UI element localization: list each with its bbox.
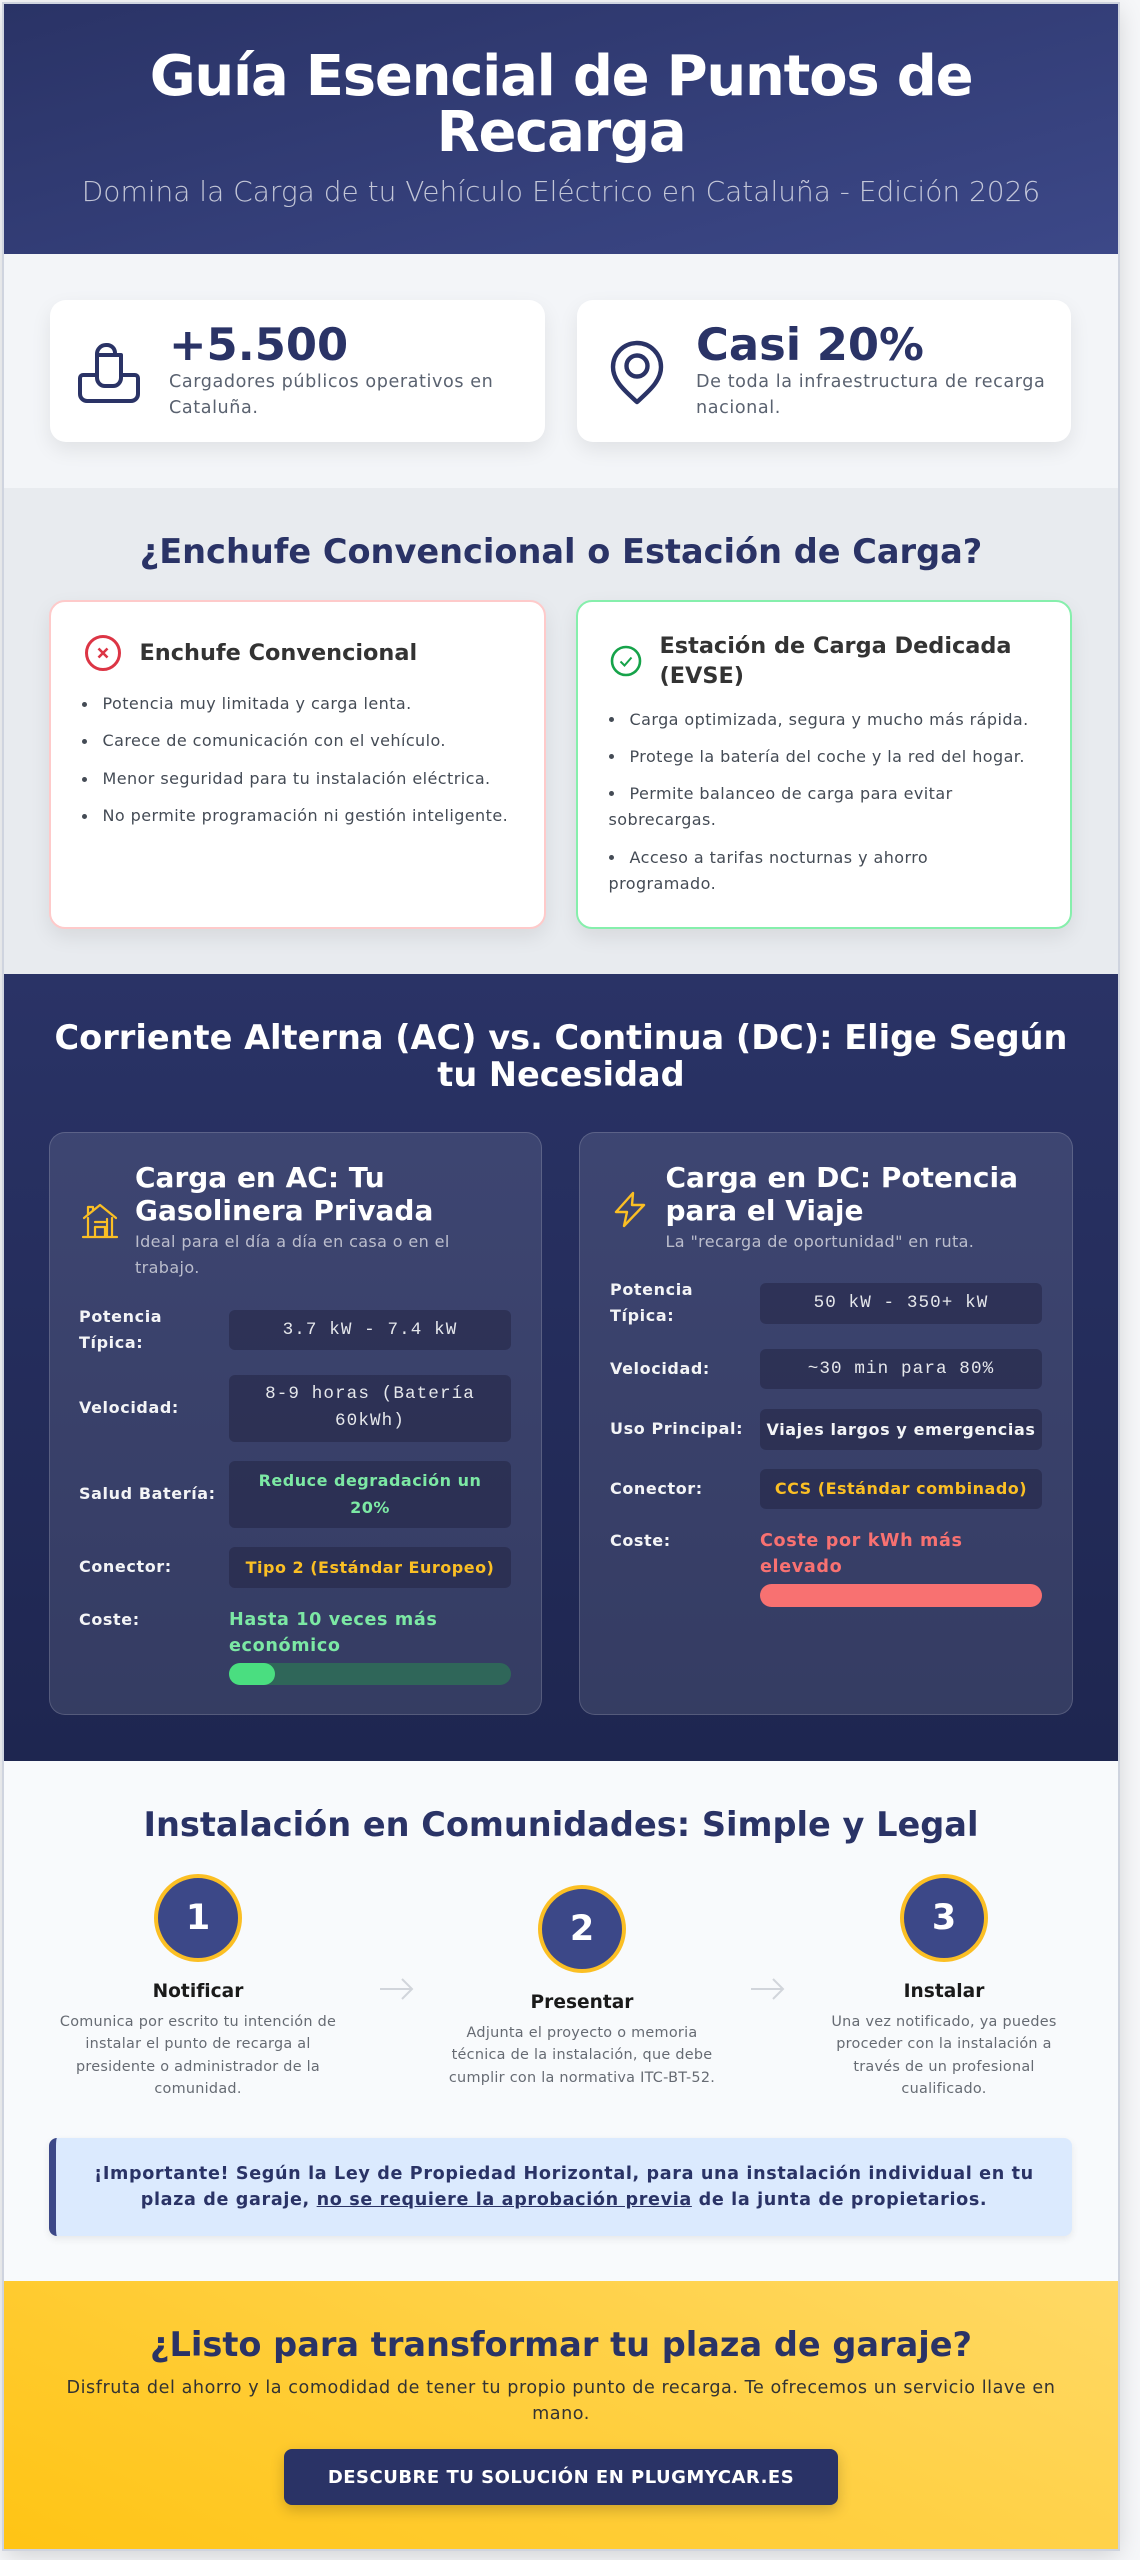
step number: 1 xyxy=(186,1898,210,1938)
stat description: Cataluña. xyxy=(169,398,259,418)
panel title: Estación de Carga Dedicada xyxy=(660,633,1012,659)
DC title: Carga en DC: Potencia xyxy=(666,1161,1018,1194)
icon: check xyxy=(610,646,642,676)
DC row: speed: ~30 min para 80% xyxy=(808,1359,994,1379)
stat value: Casi 20% xyxy=(696,318,924,371)
DC row: cost with bar xyxy=(610,1531,1042,1607)
arrow xyxy=(751,1978,784,2000)
AC row: power: Potencia xyxy=(79,1307,162,1326)
AC row: connector: Conector: xyxy=(79,1557,172,1576)
step title: Presentar xyxy=(531,1992,633,2013)
stat value: +5.500 xyxy=(169,318,348,371)
DC row: connector: CCS (Estándar combinado) xyxy=(775,1479,1027,1498)
AC title: Carga en AC: Tu xyxy=(135,1161,385,1194)
panel: dedicated charging station xyxy=(576,600,1072,929)
feature list: Carece de comunicación con el vehículo. xyxy=(102,731,446,750)
AC subtitle: Ideal para el día a día en casa o en el xyxy=(135,1232,450,1251)
AC subtitle: trabajo. xyxy=(135,1258,200,1277)
step text: técnica de la instalación, que debe xyxy=(452,2047,712,2063)
icon: cross xyxy=(85,635,121,671)
CTA text xyxy=(67,2378,1055,2424)
icon: map pin xyxy=(610,340,664,404)
installation section xyxy=(4,1761,1118,2281)
callout: legal note xyxy=(49,2138,1072,2236)
AC row: cost with bar: Coste: xyxy=(79,1610,140,1629)
AC vs DC heading: tu Necesidad xyxy=(437,1055,685,1094)
step text xyxy=(449,2024,715,2086)
AC row: speed: Velocidad: xyxy=(79,1398,179,1417)
DC row: cost with bar: Coste: xyxy=(610,1531,671,1550)
DC row: speed: Velocidad: xyxy=(610,1359,710,1378)
step 3 xyxy=(831,1874,1057,2097)
AC row: battery health xyxy=(79,1461,511,1528)
step text xyxy=(60,2014,336,2097)
panel title xyxy=(660,633,1012,689)
feature list: Potencia muy limitada y carga lenta. xyxy=(102,694,412,713)
panel title: (EVSE) xyxy=(660,663,744,689)
step text: cumplir con la normativa ITC-BT-52. xyxy=(449,2070,715,2086)
DC row: power: Típica: xyxy=(610,1306,674,1325)
CTA button: DESCUBRE TU SOLUCIÓN EN PLUGMYCAR.ES xyxy=(328,2467,794,2488)
title: Recarga xyxy=(437,100,685,164)
stat description: Cargadores públicos operativos en xyxy=(169,372,493,392)
feature list: Protege la batería del coche y la red del hogar. xyxy=(630,746,1025,766)
step number xyxy=(900,1874,988,1962)
icon: charger plug xyxy=(78,343,140,403)
AC title: Gasolinera Privada xyxy=(135,1194,433,1227)
call to action section xyxy=(4,2281,1118,2549)
DC row: cost with bar: elevado xyxy=(760,1557,842,1577)
AC vs DC section xyxy=(4,974,1118,1761)
step title: Notificar xyxy=(153,1981,243,2002)
DC row: power: 50 kW - 350+ kW xyxy=(814,1293,988,1313)
stat description xyxy=(696,372,1045,418)
feature list: Menor seguridad para tu instalación eléctrica. xyxy=(102,769,491,788)
subtitle: Domina la Carga de tu Vehículo Eléctrico en Cataluña - Edición 2026 xyxy=(82,175,1040,208)
DC row: cost with bar: Coste por kWh más xyxy=(760,1531,963,1551)
step text: través de un profesional xyxy=(853,2058,1035,2074)
AC row: battery health: 20% xyxy=(350,1498,390,1516)
AC row: speed: 60kWh) xyxy=(335,1410,405,1430)
DC row: main use: Uso Principal: xyxy=(610,1419,743,1438)
AC subtitle xyxy=(135,1232,450,1277)
DC row: main use xyxy=(610,1409,1042,1450)
panel: DC charging xyxy=(579,1132,1073,1715)
step number xyxy=(154,1874,242,1962)
step number: 2 xyxy=(570,1909,594,1949)
DC row: connector xyxy=(610,1469,1042,1509)
AC row: power xyxy=(79,1307,511,1352)
AC vs DC heading xyxy=(55,1018,1067,1094)
stat description: De toda la infraestructura de recarga xyxy=(696,372,1045,392)
step title: Instalar xyxy=(904,1981,984,2002)
step number: 3 xyxy=(932,1898,956,1938)
header banner xyxy=(4,4,1118,254)
step 2 xyxy=(449,1885,715,2086)
stats section xyxy=(4,254,1118,488)
DC title xyxy=(666,1161,1018,1227)
installation heading: Instalación en Comunidades: Simple y Legal xyxy=(144,1805,978,1844)
callout text xyxy=(94,2164,1034,2210)
step text: proceder con la instalación a xyxy=(836,2036,1052,2052)
feature list xyxy=(82,694,508,825)
callout text: ¡Importante! Según la Ley de Propiedad Horizontal, para una instalación individual en tu xyxy=(94,2164,1034,2184)
stat description: nacional. xyxy=(696,398,781,418)
cost bar xyxy=(229,1663,511,1685)
step text: Adjunta el proyecto o memoria xyxy=(467,2024,697,2040)
AC row: speed: 8-9 horas (Batería xyxy=(265,1384,475,1404)
feature list: Permite balanceo de carga para evitar xyxy=(630,784,953,802)
step text: presidente o administrador de la xyxy=(76,2058,320,2074)
AC row: power: Típica: xyxy=(79,1333,143,1352)
DC row: power xyxy=(610,1280,1042,1325)
icon: house xyxy=(82,1204,118,1238)
panel: AC charging xyxy=(49,1132,542,1715)
feature list: programado. xyxy=(608,874,716,892)
AC row: cost with bar: económico xyxy=(229,1636,341,1656)
AC row: power: 3.7 kW - 7.4 kW xyxy=(283,1320,457,1340)
DC row: connector: Conector: xyxy=(610,1479,703,1498)
step text xyxy=(831,2014,1057,2097)
AC row: battery health: Salud Batería: xyxy=(79,1484,216,1503)
AC row: speed xyxy=(79,1375,511,1442)
arrow xyxy=(380,1978,414,2000)
step text: Comunica por escrito tu intención de xyxy=(60,2014,336,2030)
step text: instalar el punto de recarga al xyxy=(85,2036,311,2052)
DC row: power: Potencia xyxy=(610,1280,693,1299)
cost bar xyxy=(760,1584,1042,1607)
callout text: plaza de garaje, no se requiere la aprobación previa de la junta de propietarios. xyxy=(141,2190,987,2210)
feature list xyxy=(608,710,1029,892)
AC vs DC heading: Corriente Alterna (AC) vs. Continua (DC): Elige Según xyxy=(55,1018,1067,1057)
feature list: Acceso a tarifas nocturnas y ahorro xyxy=(630,848,928,866)
title: Guía Esencial de Puntos de xyxy=(150,44,972,109)
CTA button xyxy=(284,2449,838,2505)
AC title xyxy=(135,1161,433,1227)
DC subtitle: La "recarga de oportunidad" en ruta. xyxy=(666,1232,974,1251)
AC row: connector: Tipo 2 (Estándar Europeo) xyxy=(246,1558,494,1577)
DC title: para el Viaje xyxy=(666,1194,863,1227)
title xyxy=(150,44,972,164)
AC row: cost with bar xyxy=(79,1610,511,1685)
DC row: speed xyxy=(610,1349,1042,1389)
stat description xyxy=(169,372,493,418)
AC row: connector xyxy=(79,1547,511,1588)
stat card: national share xyxy=(577,300,1071,442)
step text: comunidad. xyxy=(154,2081,242,2097)
AC row: cost with bar: Hasta 10 veces más xyxy=(229,1610,437,1630)
feature list: No permite programación ni gestión inteligente. xyxy=(102,806,508,825)
step 1 xyxy=(60,1874,336,2097)
comparison heading: ¿Enchufe Convencional o Estación de Carga? xyxy=(140,532,982,571)
step text: Una vez notificado, ya puedes xyxy=(831,2014,1057,2030)
AC row: battery health: Reduce degradación un xyxy=(259,1471,481,1490)
DC row: main use: Viajes largos y emergencias xyxy=(766,1420,1035,1439)
CTA text: Disfruta del ahorro y la comodidad de tener tu propio punto de recarga. Te ofrecemos un servicio llave en xyxy=(67,2378,1055,2398)
panel: conventional plug xyxy=(49,600,546,929)
panel title: Enchufe Convencional xyxy=(140,640,417,666)
comparison section xyxy=(4,488,1118,974)
CTA text: mano. xyxy=(532,2404,590,2424)
feature list: sobrecargas. xyxy=(608,810,716,828)
step number xyxy=(538,1885,626,1973)
feature list: Carga optimizada, segura y mucho más rápida. xyxy=(630,710,1029,728)
CTA heading: ¿Listo para transformar tu plaza de garaje? xyxy=(150,2325,972,2364)
icon: bolt xyxy=(614,1192,646,1228)
step text: cualificado. xyxy=(901,2081,987,2097)
stat card: public chargers xyxy=(50,300,545,442)
